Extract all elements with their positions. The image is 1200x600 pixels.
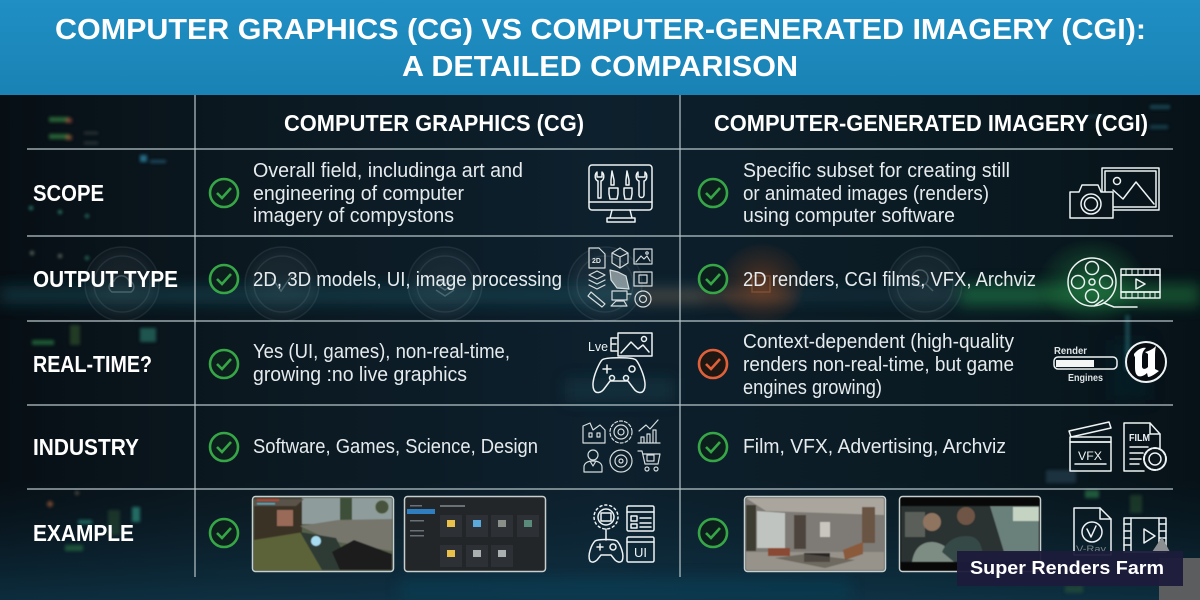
- icon: render bar: Engines: [1068, 373, 1103, 384]
- row label: example: EXAMPLE: [33, 520, 134, 546]
- faint glass discs: [85, 247, 962, 321]
- text: CGI real-time: engines growing): [743, 377, 882, 399]
- title line 2: A DETAILED COMPARISON: [402, 51, 798, 83]
- text: CG real-time: [253, 341, 510, 386]
- check icons: CGI column: [699, 179, 727, 547]
- icon: robot, controller and UI: [589, 505, 654, 562]
- icon: orange check: [699, 350, 727, 378]
- icon: camera and picture: [1070, 168, 1159, 218]
- icon: VFX clapperboard: VFX: [1078, 449, 1102, 463]
- row label: real-time: REAL-TIME?: [33, 351, 152, 377]
- text: CGI scope: Specific subset for creating still: [743, 160, 1010, 182]
- corner patch: [1159, 558, 1200, 600]
- icon: robot, controller and UI: UI: [634, 545, 647, 560]
- row label: scope: SCOPE: [33, 180, 104, 206]
- column heading: CG: COMPUTER GRAPHICS (CG): [284, 110, 584, 136]
- icon: V-Ray file and video strip: V-Ray: [1076, 544, 1107, 554]
- column heading: CGI: COMPUTER-GENERATED IMAGERY (CGI): [714, 110, 1148, 136]
- text: CGI output: 2D renders, CGI films, VFX, Archviz: [743, 269, 1036, 291]
- check icons: CG column: [210, 179, 238, 547]
- text: CG scope: engineering of computer: [253, 183, 464, 205]
- text: CG output: 2D, 3D models, UI, image processing: [253, 269, 562, 291]
- icon: unreal engine logo: [1126, 342, 1166, 382]
- title banner: [0, 0, 1200, 95]
- text: CG scope: imagery of compystons: [253, 205, 454, 227]
- text: CG scope: [253, 160, 523, 227]
- text: CGI real-time: renders non-real-time, but game: [743, 354, 1014, 376]
- text: CG real-time: growing :no live graphics: [253, 364, 467, 386]
- row label: industry: INDUSTRY: [33, 434, 139, 460]
- icon grid: industries: [583, 420, 660, 472]
- text: CGI real-time: Context-dependent (high-quality: [743, 331, 1014, 353]
- icon: film document with gear: FILM: [1129, 433, 1150, 444]
- title line 1: COMPUTER GRAPHICS (CG) VS COMPUTER-GENERATED IMAGERY (CGI):: [55, 14, 1146, 46]
- watermark: Super Renders Farm: [970, 558, 1164, 578]
- teal light band: [0, 284, 1200, 600]
- table grid lines: [27, 95, 1173, 577]
- icon: film document with gear: [1124, 423, 1166, 471]
- text: CGI scope: or animated images (renders): [743, 183, 989, 205]
- icon: VFX clapperboard: [1069, 422, 1111, 471]
- watermark: [957, 551, 1183, 586]
- thumbnail: game screenshot: [252, 496, 394, 572]
- icon: live image and game controller: [588, 333, 652, 393]
- icon grid: output types: [588, 248, 652, 307]
- text: CG scope: Overall field, includinga art and: [253, 160, 523, 182]
- text: CG industry: Software, Games, Science, Design: [253, 436, 538, 458]
- text: CG real-time: Yes (UI, games), non-real-time,: [253, 341, 510, 363]
- row label: output type: OUTPUT TYPE: [33, 266, 178, 292]
- icon grid: output types: 2D: [592, 258, 601, 265]
- text: CGI real-time: [743, 331, 1014, 399]
- text: CGI scope: [743, 160, 1010, 227]
- icon: film reel and strip: [1068, 258, 1160, 307]
- icon: render bar: Render: [1054, 346, 1087, 357]
- icon: live image and game controller: Lve: [588, 339, 608, 354]
- text: CGI scope: using computer software: [743, 205, 955, 227]
- icon: V-Ray file and video strip: [1074, 508, 1170, 555]
- icon: render bar: [1054, 346, 1117, 384]
- blurred server lights: [29, 105, 1170, 593]
- thumbnail: dark UI screenshot: [404, 496, 546, 572]
- thumbnail: archviz interior: [744, 496, 886, 572]
- thumbnail: film still: [900, 496, 1040, 572]
- icon: monitor with tools: [589, 165, 652, 222]
- text: CGI industry: Film, VFX, Advertising, Archviz: [743, 436, 1006, 458]
